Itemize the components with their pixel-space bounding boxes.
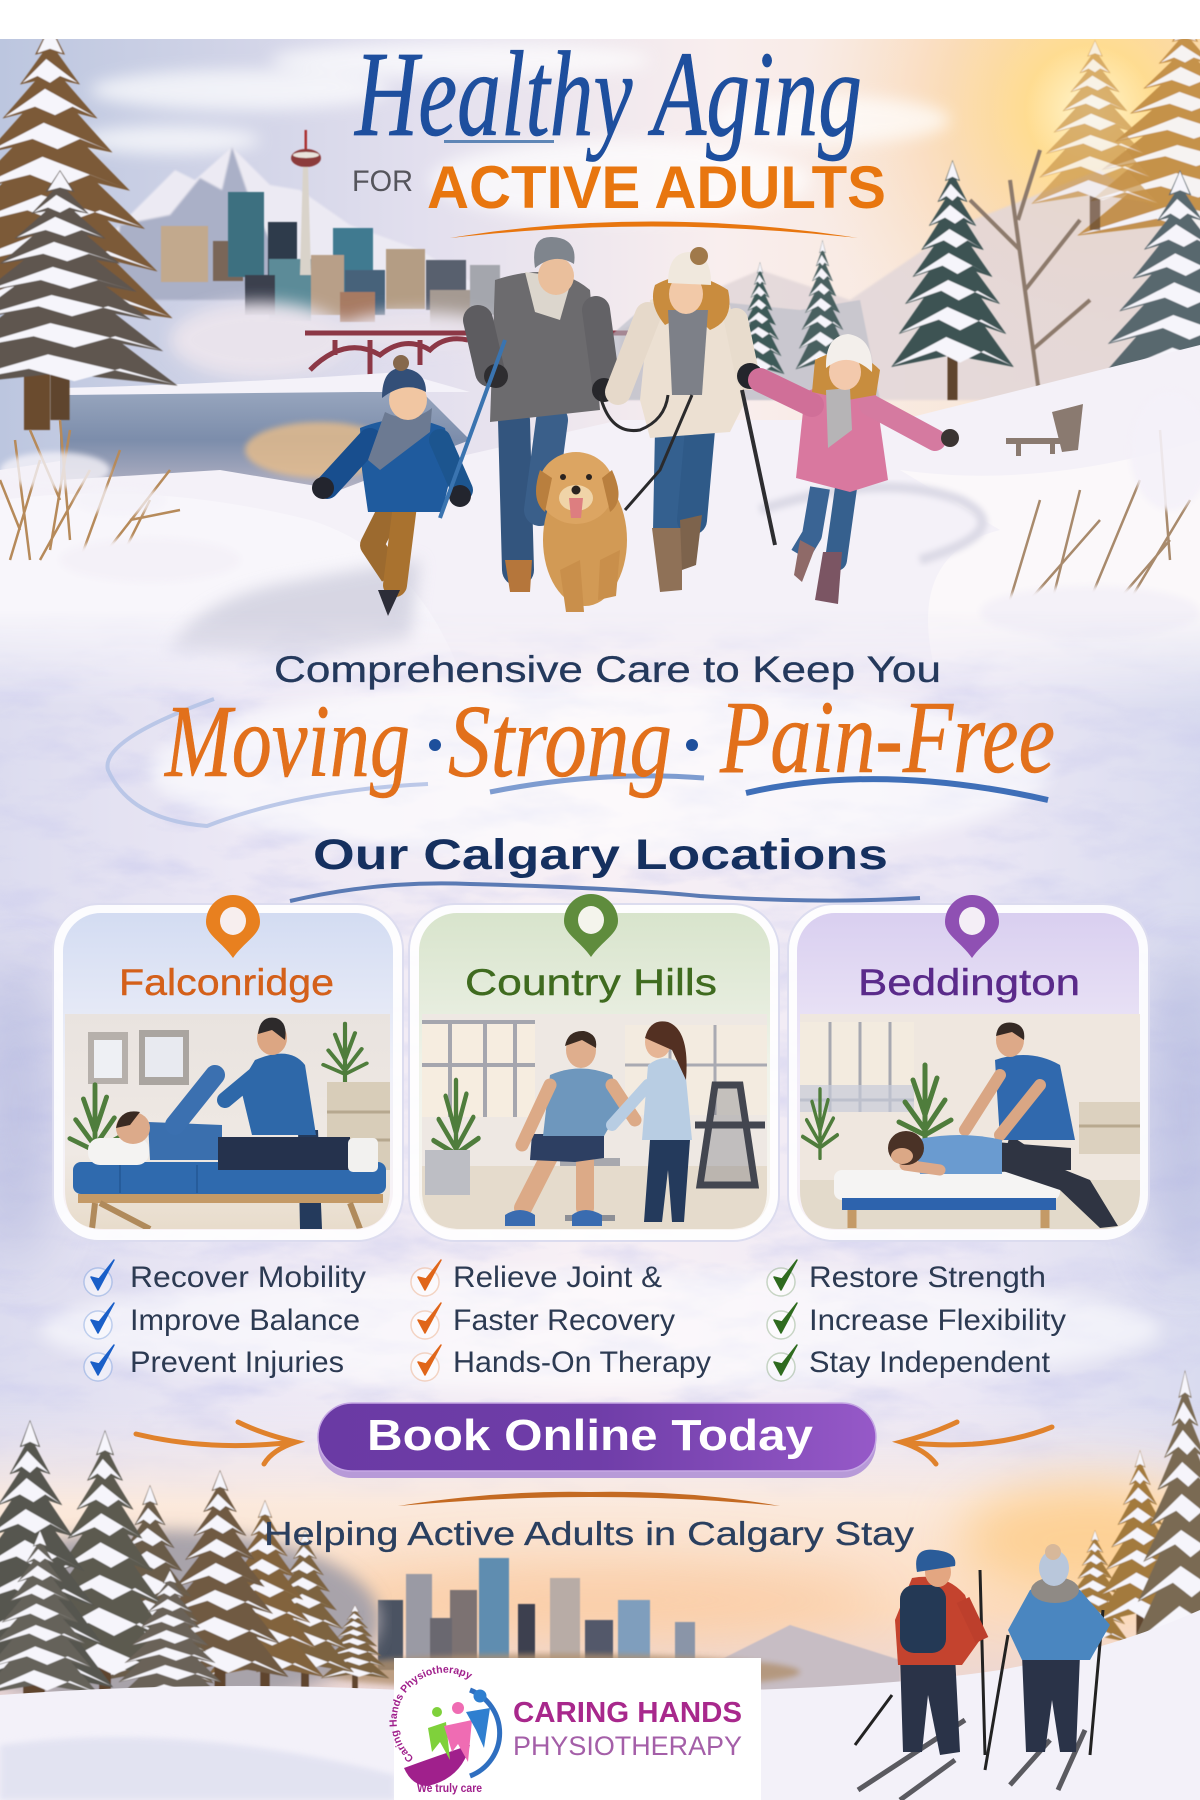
- check row Improve Balance: Improve Balance: [130, 1304, 360, 1337]
- background trees right: [890, 39, 1200, 401]
- girl: [760, 334, 959, 604]
- snowy ground and path: [0, 345, 1200, 663]
- clinic photo: arm stretch: [65, 1014, 390, 1229]
- skier in red jacket: [855, 1550, 985, 1800]
- boy: [312, 355, 471, 616]
- book online button: Book Online Today: [367, 1411, 814, 1460]
- check row Restore Strength: Restore Strength: [809, 1261, 1046, 1294]
- distant city skyline: [320, 1558, 900, 1690]
- tagline: Moving Strong Pain-Free: [163, 680, 1055, 799]
- right arrow to button: [901, 1422, 1052, 1464]
- skiers: [855, 1544, 1110, 1800]
- tagline: Moving Strong Pain-Free: Strong: [448, 684, 672, 799]
- red bridge: [305, 333, 640, 378]
- orange arc: [450, 222, 858, 238]
- orange headline: ACTIVE ADULTS: [427, 154, 886, 221]
- subtitle: Comprehensive Care to Keep You: [274, 649, 941, 690]
- location pin green: [564, 894, 618, 957]
- frosted shrubs: [0, 420, 1191, 600]
- skier in blue jacket: [985, 1544, 1110, 1790]
- panel: Country Hills: [409, 894, 779, 1241]
- tagline: Moving Strong Pain-Free: Moving: [163, 684, 410, 799]
- clinic photo: seated assessment: [422, 1014, 767, 1229]
- left pine forest: [0, 1420, 389, 1730]
- logo tagline: We truly care: [417, 1783, 482, 1795]
- dog: [536, 452, 627, 612]
- heading accent line: [444, 140, 554, 143]
- logo block: [389, 1658, 761, 1800]
- panel: Beddington: [788, 895, 1149, 1241]
- logo emblem: Caring Hands Physiotherapy: [389, 1666, 472, 1762]
- check row Prevent Injuries: Prevent Injuries: [130, 1346, 344, 1379]
- panel: Falconridge: [53, 895, 403, 1241]
- check row Stay Independent: Stay Independent: [809, 1346, 1051, 1379]
- left big pine: [0, 25, 178, 430]
- orange swoosh: [398, 1492, 780, 1506]
- heading underline swoosh: [290, 883, 920, 901]
- book online button: [318, 1403, 876, 1478]
- left arrow to button: [136, 1422, 296, 1464]
- location name: Country Hills: [465, 962, 717, 1003]
- mid section snow background: [0, 600, 1200, 1540]
- decorative swoosh behind tagline: [107, 699, 1048, 826]
- closing line: Helping Active Adults in Calgary Stay: [264, 1515, 915, 1552]
- mom: [600, 247, 775, 592]
- hero winter scene: [0, 39, 1200, 663]
- logo subtitle: PHYSIOTHERAPY: [513, 1731, 742, 1761]
- family walking with dog: [312, 237, 959, 616]
- for label: FOR: [352, 165, 413, 198]
- right pine forest: [1061, 1370, 1200, 1690]
- main title: [352, 27, 886, 238]
- location pin orange: [206, 895, 260, 958]
- logo wordmark: CARING HANDS: [513, 1697, 742, 1729]
- check row Recover Mobility: Recover Mobility: [130, 1261, 366, 1294]
- Calgary skyline with tower: [161, 130, 500, 378]
- bottom sunset scene: [0, 1370, 1200, 1800]
- bench: [1006, 404, 1083, 456]
- snow field: [0, 1610, 1200, 1800]
- location name: Falconridge: [119, 962, 334, 1003]
- check row Increase Flexibility: Increase Flexibility: [809, 1304, 1066, 1337]
- benefits list: [84, 1260, 1066, 1381]
- logo emblem: [389, 1666, 502, 1786]
- check row Hands-On Therapy: Hands-On Therapy: [453, 1346, 711, 1379]
- clinic photo: back treatment: [800, 1014, 1140, 1229]
- far treeline: [600, 240, 880, 400]
- locations heading: Our Calgary Locations: [313, 831, 888, 879]
- check row Faster Recovery: Faster Recovery: [453, 1304, 675, 1337]
- location name: Beddington: [858, 962, 1080, 1003]
- tagline: Moving Strong Pain-Free: Pain-Free: [719, 680, 1055, 795]
- check row Relieve Joint: Relieve Joint &: [453, 1261, 662, 1294]
- script heading: Healthy Aging: [354, 27, 862, 162]
- dad: [440, 237, 616, 592]
- location pin purple: [945, 895, 999, 958]
